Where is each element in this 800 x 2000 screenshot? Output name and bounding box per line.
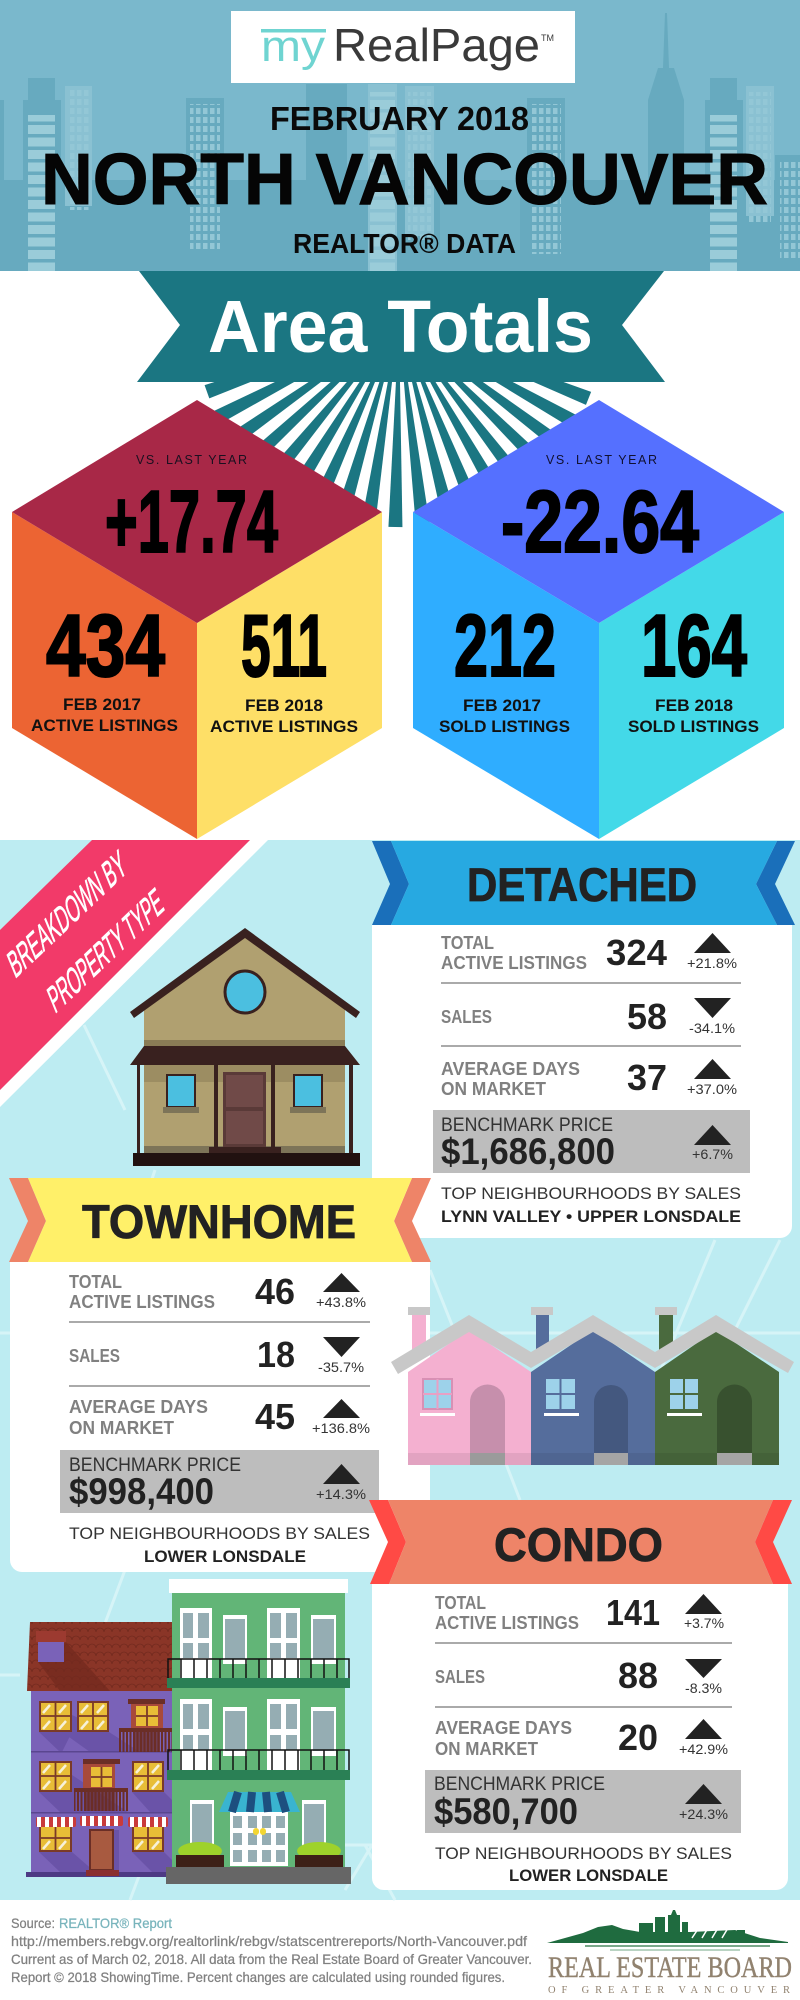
banner: breakdown by property type: BREAKDOWN BY (2, 841, 131, 986)
top neighbourhoods (69, 1524, 370, 1566)
benchmark price (60, 1450, 379, 1513)
panel: sold listings cube: FEB 2018 (655, 697, 733, 715)
stats: sales: -34.1% (689, 1020, 735, 1036)
benchmark price: BENCHMARK PRICE (441, 1114, 613, 1136)
sunburst rays (205, 316, 591, 527)
benchmark price: $580,700 (434, 1791, 578, 1832)
illustration: row of townhouses (391, 1307, 794, 1465)
stats: average days on market: AVERAGE DAYS (441, 1059, 580, 1079)
stats: sales: -8.3% (685, 1680, 722, 1696)
panel: sold listings cube (413, 400, 784, 839)
ribbon: detached: DETACHED (467, 858, 697, 911)
stats: total active listings (69, 1271, 366, 1312)
top neighbourhoods: LOWER LONSDALE (144, 1547, 306, 1566)
stats: sales: SALES (441, 1007, 492, 1027)
green building (166, 1579, 351, 1884)
benchmark price: +6.7% (692, 1146, 733, 1162)
footer source text: Report © 2018 ShowingTime. Percent changes are calculated using rounded figures. (11, 1969, 505, 1985)
stats: total active listings: TOTAL (441, 933, 494, 953)
ribbon: condo: CONDO (494, 1518, 663, 1571)
benchmark price: BENCHMARK PRICE (434, 1773, 605, 1795)
benchmark price (425, 1770, 741, 1833)
ribbon: Area Totals: Area Totals (208, 285, 593, 368)
logo: Real Estate Board of Greater Vancouver (547, 1910, 792, 1996)
stats: average days on market: 20 (618, 1717, 658, 1758)
illustration: condo buildings (26, 1579, 351, 1884)
logo: myRealPage (231, 11, 575, 83)
stats: average days on market: +136.8% (312, 1420, 370, 1436)
stats: average days on market (69, 1396, 370, 1438)
benchmark price: +14.3% (316, 1486, 366, 1502)
stats: sales (441, 996, 735, 1037)
panel: active listings cube: FEB 2018 (245, 697, 323, 715)
stats: average days on market: +42.9% (679, 1741, 728, 1757)
benchmark price: BENCHMARK PRICE (69, 1454, 241, 1476)
footer source text: Current as of March 02, 2018. All data from the Real Estate Board of Greater Vancouver. (11, 1951, 532, 1967)
stats: average days on market: +37.0% (687, 1081, 737, 1097)
stats: total active listings: 141 (606, 1592, 660, 1633)
stats: total active listings (441, 932, 737, 973)
panel: active listings cube: FEB 2017 (63, 696, 141, 714)
panel: sold listings cube: SOLD LISTINGS (628, 718, 759, 736)
card: condo (369, 1500, 792, 1890)
panel: sold listings cube: FEB 2017 (463, 697, 541, 715)
stats: sales: 88 (618, 1655, 658, 1696)
stats: sales: -35.7% (318, 1359, 364, 1375)
stats: total active listings: TOTAL (435, 1593, 486, 1613)
panel: active listings cube (12, 400, 382, 839)
logo: myRealPage: my (261, 22, 325, 71)
stats: total active listings: 324 (606, 932, 667, 973)
footer source text: http://members.rebgv.org/realtorlink/rebgv/statscentrereports/North-Vancouver.pdf (11, 1933, 527, 1949)
logo: Real Estate Board of Greater Vancouver: OF GREATER VANCOUVER (548, 1985, 790, 1996)
card: detached (372, 841, 795, 1238)
stats: sales: 58 (627, 996, 667, 1037)
top neighbourhoods: TOP NEIGHBOURHOODS BY SALES (69, 1524, 370, 1543)
panel: active listings cube: 511 (241, 596, 327, 695)
title: North Vancouver: NORTH VANCOUVER (41, 140, 768, 220)
logo: myRealPage: RealPage (333, 19, 540, 71)
stats: total active listings: ACTIVE LISTINGS (441, 953, 587, 973)
stats: sales: 18 (257, 1334, 295, 1375)
panel: sold listings cube: 164 (641, 596, 747, 695)
stats: total active listings: +3.7% (684, 1615, 724, 1631)
ribbon: townhome: TOWNHOME (82, 1195, 356, 1248)
stats: sales: SALES (69, 1346, 120, 1366)
footer source text: REALTOR® Report (59, 1915, 172, 1931)
heading: date: FEBRUARY 2018 (270, 100, 529, 137)
panel: property type background (0, 840, 800, 1900)
stats: average days on market (441, 1057, 737, 1099)
top neighbourhoods: TOP NEIGHBOURHOODS BY SALES (441, 1184, 741, 1203)
ribbon: detached (372, 841, 795, 925)
logo: myRealPage: TM (541, 33, 554, 43)
banner: breakdown by property type (0, 840, 268, 1107)
stats: sales (69, 1334, 364, 1375)
top neighbourhoods: LYNN VALLEY • UPPER LONSDALE (441, 1207, 741, 1226)
purple building (26, 1622, 172, 1877)
benchmark price: $998,400 (69, 1471, 214, 1512)
heading: realtor data: REALTOR® DATA (293, 228, 516, 259)
top neighbourhoods (435, 1844, 732, 1885)
panel: sold listings cube: SOLD LISTINGS (439, 718, 570, 736)
stats: sales (435, 1655, 722, 1696)
top neighbourhoods: LOWER LONSDALE (509, 1866, 668, 1885)
stats: total active listings: 46 (255, 1271, 295, 1312)
benchmark price: $1,686,800 (441, 1131, 615, 1172)
panel: sold listings cube: VS. LAST YEAR (546, 453, 657, 467)
stats: average days on market: 37 (627, 1057, 667, 1098)
panel: active listings cube: VS. LAST YEAR (136, 453, 247, 467)
benchmark price: +24.3% (679, 1806, 728, 1822)
top neighbourhoods: TOP NEIGHBOURHOODS BY SALES (435, 1844, 732, 1863)
top neighbourhoods (441, 1184, 741, 1226)
footer source text: Source: (11, 1915, 55, 1931)
stats: average days on market: ON MARKET (69, 1418, 174, 1438)
stats: total active listings: ACTIVE LISTINGS (69, 1292, 215, 1312)
panel: active listings cube: 434 (46, 596, 165, 695)
stats: total active listings: TOTAL (69, 1272, 122, 1292)
header panel with city skyline (0, 0, 800, 271)
panel: active listings cube: ACTIVE LISTINGS (210, 718, 358, 736)
stats: total active listings (435, 1592, 724, 1633)
ribbon: condo (369, 1500, 792, 1584)
panel: sold listings cube: 212 (454, 596, 556, 695)
stats: average days on market: 45 (255, 1396, 295, 1437)
stats: total active listings: +43.8% (316, 1294, 366, 1310)
stats: average days on market: AVERAGE DAYS (435, 1718, 572, 1738)
stats: total active listings: +21.8% (687, 955, 737, 971)
stats: sales: SALES (435, 1667, 485, 1687)
panel: sold listings cube: -22.64 (501, 472, 699, 571)
stats: average days on market: ON MARKET (441, 1079, 546, 1099)
stats: average days on market: AVERAGE DAYS (69, 1397, 208, 1417)
card: townhome (9, 1178, 431, 1572)
stats: average days on market (435, 1717, 728, 1759)
panel: active listings cube: ACTIVE LISTINGS (31, 717, 178, 735)
banner: breakdown by property type: PROPERTY TYPE (42, 879, 168, 1021)
stats: average days on market: ON MARKET (435, 1739, 538, 1759)
footer source text (11, 1915, 532, 1985)
stats: total active listings: ACTIVE LISTINGS (435, 1613, 579, 1633)
panel: active listings cube: +17.74 (105, 472, 278, 571)
benchmark price (433, 1110, 750, 1173)
illustration: detached house (130, 928, 360, 1166)
ribbon: townhome (9, 1178, 431, 1262)
ribbon: Area Totals (137, 271, 665, 382)
